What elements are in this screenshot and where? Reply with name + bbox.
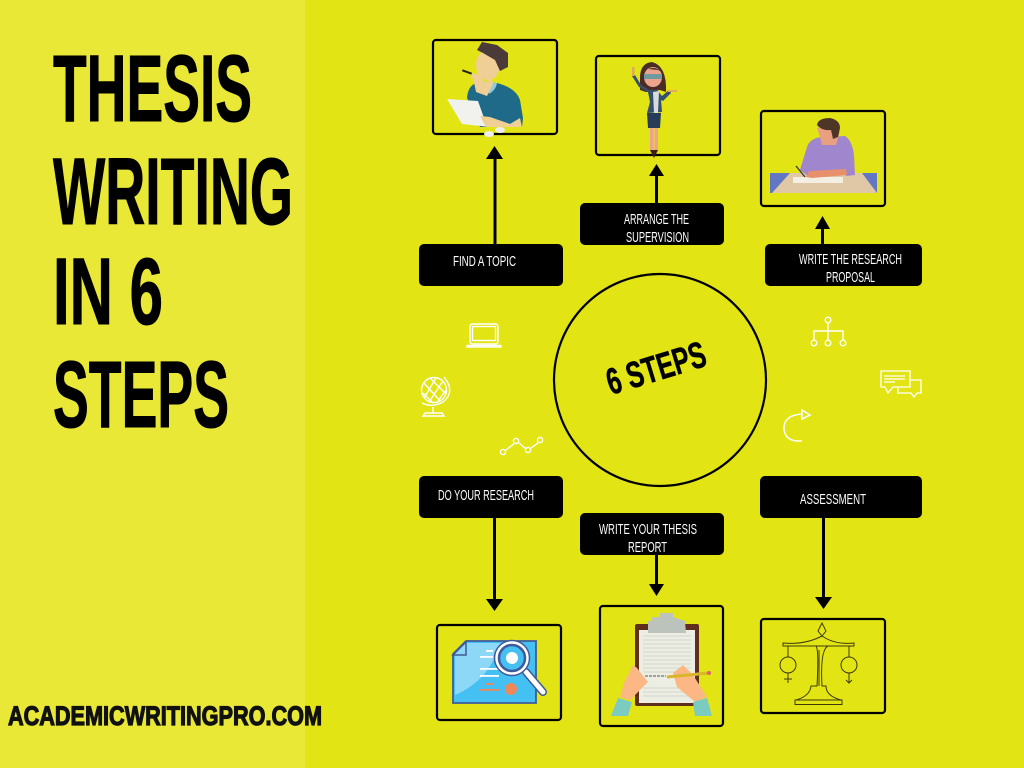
- step label: write your thesis report: WRITE YOUR THESIS: [599, 521, 697, 538]
- icon: hierarchy chart: [811, 317, 846, 346]
- image frame: man writing proposal: [761, 111, 885, 206]
- image frame: thinking student: [433, 40, 557, 137]
- icon: globe: [422, 377, 450, 416]
- icon: line graph: [500, 437, 543, 455]
- image frame: supervisor woman: [596, 56, 720, 158]
- center circle: 6 STEPS: [601, 334, 711, 403]
- step label: do your research: [419, 476, 563, 518]
- step label: write the research proposal: [765, 244, 922, 286]
- arrow: write proposal up: [815, 216, 830, 244]
- arrow: arrange the supervision up: [649, 164, 664, 203]
- image frame: scales of gender equality: [761, 619, 885, 713]
- title: IN 6: [53, 239, 163, 345]
- title: WRITING: [53, 139, 293, 245]
- image frame: clipboard and hands: [600, 606, 723, 726]
- arrow: do your research down: [486, 518, 503, 611]
- icon: speech bubbles: [881, 371, 921, 397]
- step label: find a topic: FIND A TOPIC: [453, 253, 516, 270]
- title: [53, 36, 293, 448]
- icon: return arrow: [784, 410, 810, 441]
- step label: write your thesis report: [580, 513, 724, 556]
- website url: ACADEMICWRITINGPRO.COM: [8, 701, 322, 731]
- title: THESIS: [53, 36, 252, 142]
- icon: laptop: [467, 324, 501, 347]
- step label: do your research: DO YOUR RESEARCH: [438, 487, 534, 504]
- image frame: research document with magnifier: [437, 625, 561, 720]
- step label: arrange the supervision: SUPERVISION: [626, 229, 689, 246]
- title: STEPS: [53, 342, 229, 448]
- step label: write the research proposal: PROPOSAL: [826, 269, 875, 286]
- arrow: write your report down: [649, 555, 664, 596]
- panel: left title background: [0, 0, 305, 768]
- step label: find a topic: [419, 244, 563, 286]
- center circle: [554, 274, 766, 486]
- step label: arrange the supervision: ARRANGE THE: [624, 211, 689, 228]
- arrow: assessment down: [815, 518, 832, 609]
- step label: assessment: [760, 476, 922, 518]
- step label: write your thesis report: REPORT: [628, 539, 667, 556]
- step label: write the research proposal: WRITE THE RESEARCH: [799, 251, 902, 268]
- step label: arrange the supervision: [580, 203, 724, 246]
- arrow: find a topic up: [486, 146, 503, 244]
- step label: assessment: ASSESSMENT: [800, 491, 866, 508]
